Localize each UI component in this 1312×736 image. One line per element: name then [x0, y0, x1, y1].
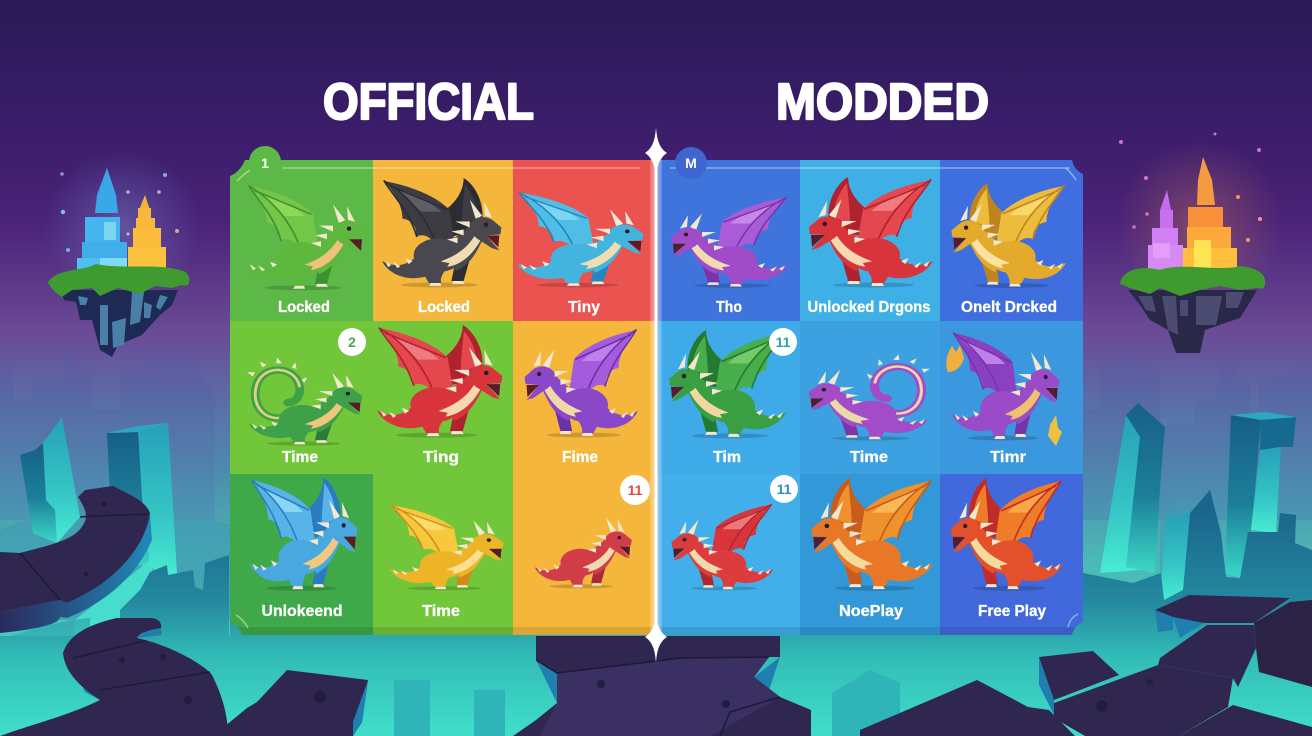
badge: 11 blue [770, 475, 798, 503]
block G [1254, 600, 1312, 687]
tower B right dark [1260, 417, 1296, 450]
block E [1158, 625, 1256, 687]
cell labels: Locked [278, 299, 330, 316]
teal glow under left platform [75, 560, 160, 660]
grass [48, 264, 189, 297]
ground [0, 600, 1312, 736]
blue crystal [77, 168, 127, 276]
badge: 2 [338, 328, 366, 356]
mid mound right [1160, 501, 1215, 620]
platform: right blocks [860, 595, 1312, 736]
tower A dark face [1126, 403, 1165, 573]
flame: tail tip [946, 345, 964, 372]
badge: 11 red [620, 475, 650, 505]
yellow crystal [128, 195, 166, 276]
cell labels: Tho [716, 299, 742, 316]
cell labels: Fime [562, 449, 598, 466]
tower A bright face [1100, 415, 1140, 573]
ground silhouette left [120, 555, 229, 660]
teal tower left small [20, 417, 80, 543]
cell labels: Locked [418, 299, 470, 316]
block C [1054, 665, 1233, 736]
small column [1160, 513, 1190, 600]
dragon: gold [951, 183, 1066, 288]
block B [1039, 651, 1119, 715]
far skyline left [0, 352, 215, 520]
dragon: red small modded [671, 504, 773, 590]
orange crystal [1183, 157, 1237, 276]
tower B top [1231, 412, 1296, 420]
badge: M: M [685, 155, 697, 171]
cell labels: Free Play [978, 603, 1046, 620]
cell labels: Time [850, 449, 888, 466]
dragon: black [382, 178, 501, 287]
panel cell colours [230, 160, 1083, 635]
dragon: purple [671, 198, 788, 288]
cell labels: Timr [990, 449, 1026, 466]
cell labels [262, 299, 1057, 620]
star top [645, 127, 667, 179]
sparkles [60, 132, 1262, 252]
title: OFFICIAL: OFFICIAL [323, 73, 534, 130]
badge: M [675, 147, 707, 179]
platform: left block [213, 670, 368, 736]
dragon: green modded [669, 330, 786, 438]
block A [860, 680, 1075, 736]
dragon: purple curl [809, 354, 930, 440]
platform: left lower [0, 618, 228, 736]
grass [1120, 266, 1265, 296]
cell labels: Ting [423, 449, 459, 466]
towers right [1100, 403, 1296, 600]
badge: 11 teal: 11 [776, 334, 791, 350]
cell labels: Time [282, 449, 318, 466]
cell labels: Onelt Drcked [961, 299, 1057, 316]
teal pillars [394, 670, 900, 736]
dragon: yellow [390, 505, 503, 590]
island rock [1128, 290, 1257, 353]
far skyline right [1083, 350, 1312, 520]
cell labels: Unlokeend [262, 603, 342, 620]
cell labels: Unlocked Drgons [808, 299, 931, 316]
dragon: blue [250, 477, 357, 591]
cell labels: Tim [713, 449, 741, 466]
dragon: small red [535, 518, 632, 588]
cell labels: Time [422, 603, 460, 620]
dragon: purple left-facing wing [525, 330, 638, 438]
teal tower left tall [107, 423, 177, 577]
dragon: purple right-facing [952, 333, 1059, 440]
cell labels: Tiny [568, 299, 600, 316]
badge: 2: 2 [348, 334, 356, 350]
dragon: red [377, 325, 502, 438]
comparison panel [230, 146, 1083, 635]
platform: left upper [0, 486, 152, 633]
dragon: green curl [247, 357, 362, 446]
badge: 1 [249, 146, 281, 178]
cell labels: NoePlay [839, 603, 903, 620]
floating island right [1115, 140, 1285, 353]
island rock [60, 290, 178, 357]
title: MODDED: MODDED [776, 73, 989, 130]
flame: right [1048, 415, 1062, 446]
badge: 11 blue: 11 [777, 481, 792, 497]
tower B left face [1225, 415, 1261, 578]
dragon: green [247, 186, 364, 290]
dragon: orange [811, 478, 933, 591]
badge: 1: 1 [261, 155, 269, 171]
ground silhouette right [1083, 490, 1312, 660]
dragon: red modded [809, 177, 933, 288]
block D [1179, 705, 1312, 736]
center divider [645, 127, 667, 663]
block F [1155, 595, 1290, 638]
mid mound left [0, 511, 230, 620]
floating island left [42, 150, 202, 357]
platform: center [513, 636, 811, 736]
badge: 11 red: 11 [628, 482, 643, 498]
purple crystal [1148, 190, 1183, 276]
tower B right bright [1251, 447, 1281, 533]
badge: 11 teal [769, 328, 797, 356]
dragon: cyan [517, 193, 644, 287]
star bottom [645, 611, 667, 663]
dragon: orange red [951, 478, 1063, 591]
